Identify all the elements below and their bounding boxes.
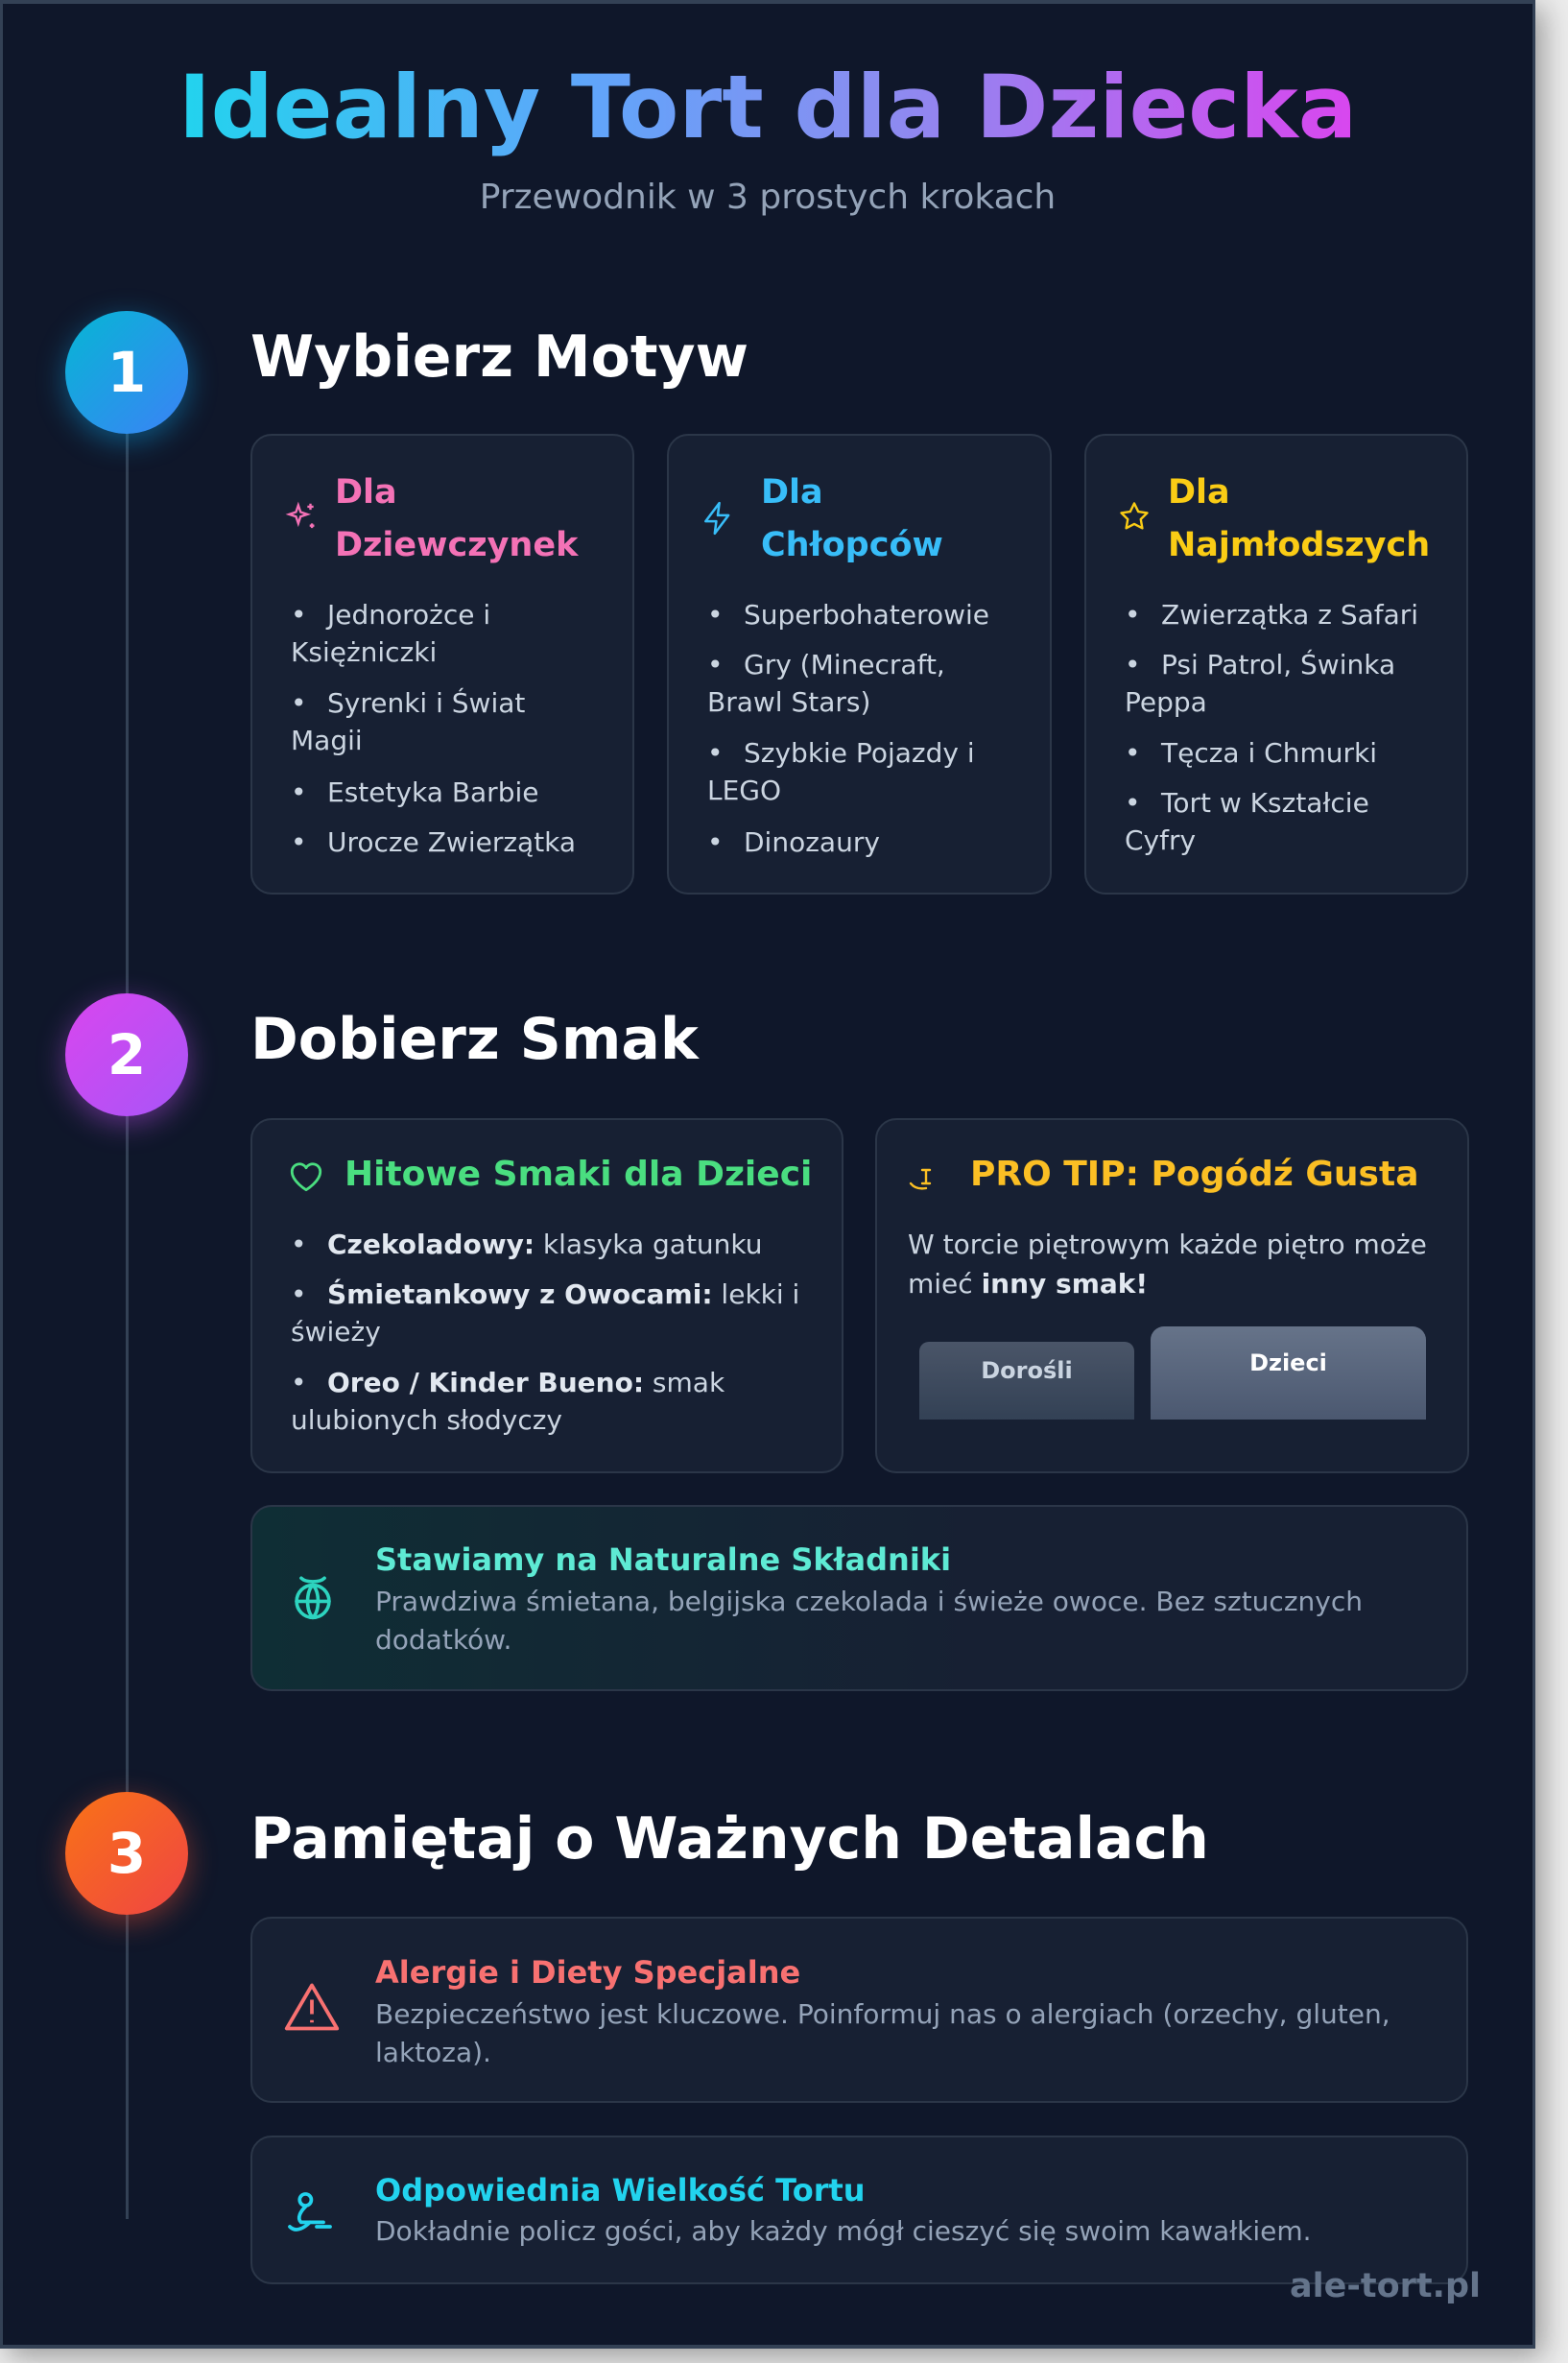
list: • [707, 599, 724, 631]
card title [761, 473, 943, 564]
list [291, 599, 490, 668]
panel: popular flavours: ulubionych słodyczy [291, 1404, 562, 1436]
icon: sparkles [286, 501, 315, 528]
panel: youngest: • [1125, 787, 1141, 819]
step 3 circle: 3 [107, 1821, 146, 1886]
panel: youngest: • [1125, 649, 1141, 680]
banner text: Prawdziwa śmietana, belgijska czekolada i świeże owoce. Bez sztucznych [375, 1586, 1363, 1617]
tab: adults: Dorośli [981, 1357, 1073, 1384]
panel: cake size [250, 2136, 1468, 2284]
panel: popular flavours: • [291, 1278, 307, 1310]
card title: Najmłodszych [1168, 526, 1430, 564]
card title [1168, 473, 1430, 564]
panel: popular flavours: Oreo / Kinder Bueno: smak [327, 1367, 725, 1398]
tab: kids [1151, 1326, 1426, 1420]
list: Superbohaterowie [744, 599, 989, 631]
list: Zwierzątka z Safari [1161, 599, 1418, 631]
panel: pro tip [875, 1118, 1469, 1473]
tab: adults [919, 1342, 1134, 1420]
panel: popular flavours: świeży [291, 1316, 381, 1348]
panel: natural ingredients [250, 1505, 1468, 1691]
icon: person [288, 2192, 332, 2232]
panel: youngest: Tort w Kształcie [1161, 787, 1369, 819]
panel: youngest: Cyfry [1125, 824, 1196, 856]
panel: boys [667, 434, 1052, 895]
panel: youngest: • [1125, 737, 1141, 769]
card title: Hitowe Smaki dla Dzieci [344, 1155, 812, 1194]
panel: boys: • [707, 649, 724, 680]
panel: boys: • [707, 826, 724, 858]
panel: popular flavours: Śmietankowy z Owocami: lekki i [327, 1278, 799, 1310]
panel: girls: • [291, 776, 307, 808]
step 3 heading: Pamiętaj o Ważnych Detalach [250, 1805, 1209, 1873]
list: Czekoladowy: klasyka gatunku [327, 1229, 763, 1260]
panel: girls: Syrenki i Świat [327, 687, 525, 719]
banner text [375, 1586, 1363, 1656]
panel: girls: Urocze Zwierzątka [327, 826, 576, 858]
icon: lightning [704, 501, 729, 536]
step 3 circle [65, 1792, 188, 1915]
tip text: mieć inny smak! [908, 1268, 1148, 1300]
panel: allergies [250, 1917, 1468, 2103]
card title: Dziewczynek [335, 526, 578, 564]
allergies text: laktoza). [375, 2037, 491, 2068]
allergies text: Bezpieczeństwo jest kluczowe. Poinformuj nas o alergiach (orzechy, gluten, [375, 1998, 1390, 2030]
panel: boys: • [707, 737, 724, 769]
banner text: dodatków. [375, 1624, 511, 1656]
card title: Dla [335, 473, 397, 512]
title: Idealny Tort dla Dziecka [178, 58, 1357, 158]
panel: popular flavours: • [291, 1367, 307, 1398]
panel: youngest: Psi Patrol, Świnka [1161, 649, 1395, 680]
list: • [1125, 599, 1141, 631]
panel: boys: Brawl Stars) [707, 686, 870, 718]
icon: tip [910, 1169, 931, 1190]
list: • [291, 599, 307, 631]
tip text: W torcie piętrowym każde piętro może [908, 1229, 1427, 1260]
step 1 heading: Wybierz Motyw [250, 323, 748, 391]
step 1 circle [65, 311, 188, 434]
list: Księżniczki [291, 636, 437, 668]
icon: globe [295, 1576, 331, 1620]
banner title: Stawiamy na Naturalne Składniki [375, 1541, 951, 1578]
allergies title: Alergie i Diety Specjalne [375, 1954, 800, 1991]
subtitle: Przewodnik w 3 prostych krokach [480, 178, 1056, 217]
allergies text [375, 1998, 1390, 2068]
card title: Dla [761, 473, 823, 512]
panel: boys: LEGO [707, 775, 781, 806]
icon: heart [290, 1162, 322, 1192]
list: Jednorożce i [327, 599, 490, 631]
card title [335, 473, 579, 564]
panel: boys: Gry (Minecraft, [744, 649, 945, 680]
size text: Dokładnie policz gości, aby każdy mógł cieszyć się swoim kawałkiem. [375, 2215, 1312, 2247]
card title: Chłopców [761, 526, 943, 564]
step 2 circle: 2 [107, 1022, 146, 1087]
list: • [291, 1229, 307, 1260]
panel: youngest [1084, 434, 1468, 895]
panel: girls: Estetyka Barbie [327, 776, 538, 808]
panel: boys: Szybkie Pojazdy i [744, 737, 975, 769]
icon: warning [284, 1983, 340, 2031]
icon: star [1120, 502, 1149, 530]
panel: girls: • [291, 826, 307, 858]
panel: girls [250, 434, 634, 895]
step 1 circle: 1 [107, 340, 146, 405]
panel: girls: Magii [291, 725, 363, 756]
panel: girls: • [291, 687, 307, 719]
panel: boys: Dinozaury [744, 826, 880, 858]
tab: kids: Dzieci [1249, 1349, 1327, 1376]
card title: PRO TIP: Pogódź Gusta [970, 1155, 1418, 1194]
step 2 circle [65, 993, 188, 1116]
panel: popular flavours [250, 1118, 843, 1473]
step 2 heading: Dobierz Smak [250, 1006, 699, 1073]
timeline line [126, 422, 129, 2219]
card title: Dla [1168, 473, 1230, 512]
tip text [908, 1229, 1427, 1300]
size title: Odpowiednia Wielkość Tortu [375, 2172, 866, 2208]
panel: youngest: Peppa [1125, 686, 1207, 718]
panel: youngest: Tęcza i Chmurki [1161, 737, 1377, 769]
watermark: ale-tort.pl [1290, 2267, 1481, 2305]
